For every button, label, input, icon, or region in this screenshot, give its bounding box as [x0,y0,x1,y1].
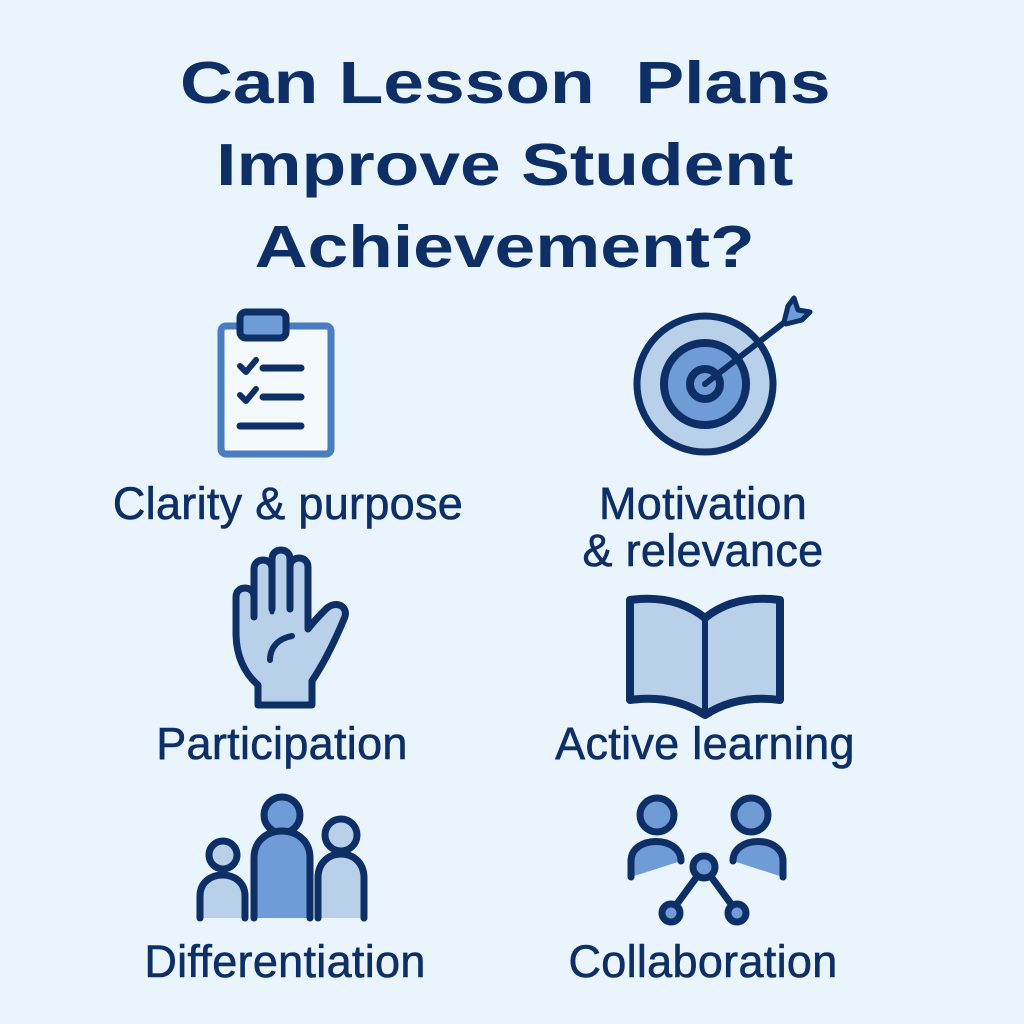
label: clarity: Clarity & purpose [113,478,463,529]
title: Can Lesson Plans [180,50,830,116]
label: motivation: Motivation [599,478,807,529]
label: collaboration: Collaboration [568,936,838,987]
title [180,50,830,280]
icon: hand [236,550,345,705]
label: active learning: Active learning [555,718,855,769]
icon: book [630,599,780,715]
title: Improve Student [216,132,794,198]
icon: target [637,298,810,452]
icon: clipboard [221,312,331,454]
label: motivation: & relevance [583,525,823,576]
icon: people [200,797,364,918]
label: participation: Participation [156,718,408,769]
label: motivation [583,478,823,576]
icon: collaboration [631,798,783,922]
title: Achievement? [255,214,755,280]
label: differentiation: Differentiation [144,936,426,987]
